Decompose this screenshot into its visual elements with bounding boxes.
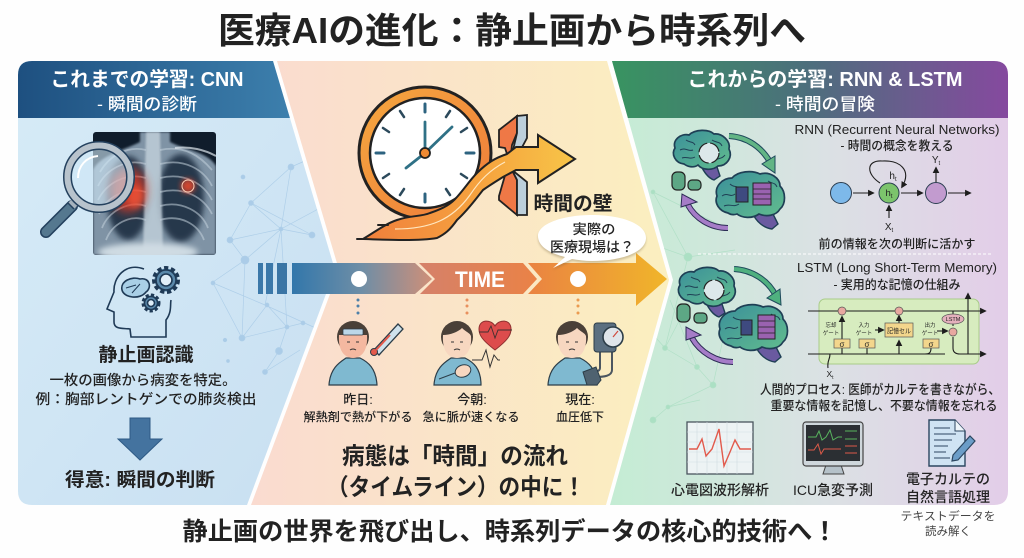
text: human process: 人間的プロセス: 医師がカルテを書きながら、	[760, 382, 1000, 397]
text block: still image recognition: 例：胸部レントゲンでの肺炎検出	[36, 391, 256, 407]
icon: ICU monitor	[803, 422, 863, 474]
diagram: RNN: h	[889, 171, 895, 182]
text: RNN caption: 前の情報を次の判断に活かす	[818, 236, 976, 251]
icon: clock breaking through wall	[357, 87, 575, 240]
text: TIME: TIME	[455, 267, 505, 292]
wall	[499, 116, 517, 163]
timeline labels: 急に脈が速くなる	[422, 409, 520, 424]
chest x-ray	[93, 132, 216, 261]
timeline arrow	[258, 253, 667, 306]
diagram: LSTM: 記憶セル	[887, 326, 911, 335]
icon: brains LSTM	[677, 267, 788, 362]
icon: heart with pulse	[472, 321, 512, 367]
text: ICU: ICU急変予測	[793, 482, 873, 498]
timeline labels	[304, 392, 604, 424]
timeline labels: 血圧低下	[556, 410, 604, 424]
timeline labels: 今朝:	[457, 392, 487, 407]
text: EHR NLP: 自然言語処理	[906, 489, 990, 505]
text: strength: 得意: 瞬間の判断	[65, 469, 215, 491]
panel header: CNN	[18, 61, 290, 118]
callout: speech bubble: 実際の	[572, 222, 616, 237]
callout: speech bubble: 医療現場は？	[550, 239, 634, 255]
diagram: RNN: t	[892, 228, 894, 234]
icon: magnifying glass	[46, 146, 130, 232]
decorative network	[640, 190, 735, 423]
diagram: RNN: t	[891, 194, 893, 200]
icon: ECG	[687, 422, 753, 474]
left panel heading: これまでの学習: CNN	[50, 68, 244, 91]
timeline labels: 解熱剤で熱が下がる	[304, 409, 412, 424]
person: now low blood pressure	[548, 321, 623, 385]
diagram: LSTM: σ	[929, 340, 934, 349]
right panel heading: - 時間の冒険	[775, 95, 875, 114]
diagram: RNN	[830, 155, 970, 234]
arrow: down	[118, 418, 162, 460]
diagram: RNN: X	[885, 222, 892, 233]
text block: still image recognition	[36, 343, 256, 407]
text: EHR NLP: 電子カルテの	[906, 471, 990, 487]
text: EHR NLP: 読み解く	[925, 524, 971, 538]
panel: timeline middle	[251, 61, 669, 505]
right panel heading	[688, 68, 962, 114]
timeline labels: 現在:	[565, 392, 595, 407]
text: RNN heading: RNN (Recurrent Neural Networks)	[794, 122, 1000, 137]
icon: thermometer	[370, 324, 403, 356]
person: yesterday fever	[329, 321, 403, 385]
text block: still image recognition: 一枚の画像から病変を特定。	[50, 372, 236, 388]
callout: speech bubble	[538, 215, 646, 270]
decorative network	[210, 162, 318, 375]
text: LSTM heading: - 実用的な記憶の仕組み	[834, 277, 960, 292]
text: wall of time: 時間の壁	[534, 193, 612, 215]
text: EHR NLP	[900, 471, 996, 538]
person: this morning palpitations	[434, 321, 512, 385]
text: human process	[760, 382, 1000, 413]
diagram: LSTM: t	[832, 375, 834, 381]
icon: brains RNN	[672, 130, 784, 229]
footer message: 静止画の世界を飛び出し、時系列データの核心的技術へ！	[182, 517, 838, 546]
timeline dots	[356, 298, 580, 314]
diagram: LSTM: ゲート	[823, 329, 839, 337]
diagram: RNN: Y	[932, 155, 938, 166]
key message: （タイムライン）の中に！	[327, 474, 585, 500]
left panel heading	[50, 68, 244, 114]
diagram: RNN: t	[938, 161, 940, 167]
text: human process: 重要な情報を記憶し、不要な情報を忘れる	[770, 398, 998, 413]
diagram: LSTM: σ	[865, 340, 870, 349]
diagram: LSTM: ゲート	[922, 329, 938, 337]
icon: document and pen	[929, 420, 975, 466]
panel header: RNN LSTM	[600, 61, 1010, 118]
icon: blood pressure monitor	[583, 323, 623, 385]
timeline labels: 昨日:	[343, 392, 373, 407]
diagram: LSTM: σ	[840, 340, 845, 349]
key message	[327, 443, 585, 500]
right panel heading: これからの学習: RNN & LSTM	[688, 68, 962, 91]
text: RNN heading	[794, 122, 1000, 153]
text: RNN heading: - 時間の概念を教える	[840, 138, 954, 153]
text: ECG: 心電図波形解析	[671, 482, 769, 498]
panel: CNN past learning	[18, 61, 348, 505]
text: LSTM heading	[797, 260, 997, 292]
diagram: LSTM: 忘却	[825, 321, 837, 329]
text block: still image recognition: 静止画認識	[98, 343, 194, 366]
title: 医療AIの進化：静止画から時系列へ	[218, 10, 806, 51]
diagram: LSTM	[808, 294, 985, 381]
diagram: LSTM: X	[826, 369, 832, 379]
diagram: RNN: t	[895, 177, 897, 183]
left panel heading: - 瞬間の診断	[97, 95, 197, 114]
divider	[698, 253, 993, 255]
panel: RNN LSTM future learning	[600, 61, 1010, 505]
diagram: LSTM: 入力	[858, 321, 870, 329]
diagram: LSTM: LSTM	[946, 317, 961, 323]
diagram: LSTM: ゲート	[856, 329, 872, 337]
key message: 病態は「時間」の流れ	[342, 443, 568, 469]
swoosh arrow	[363, 135, 575, 240]
text: LSTM heading: LSTM (Long Short-Term Memory)	[797, 260, 997, 275]
diagram: RNN: h	[886, 188, 891, 199]
diagram: LSTM: 出力	[924, 321, 936, 329]
text: EHR NLP: テキストデータを	[900, 509, 996, 523]
icon: head with brain and gears	[107, 267, 178, 337]
